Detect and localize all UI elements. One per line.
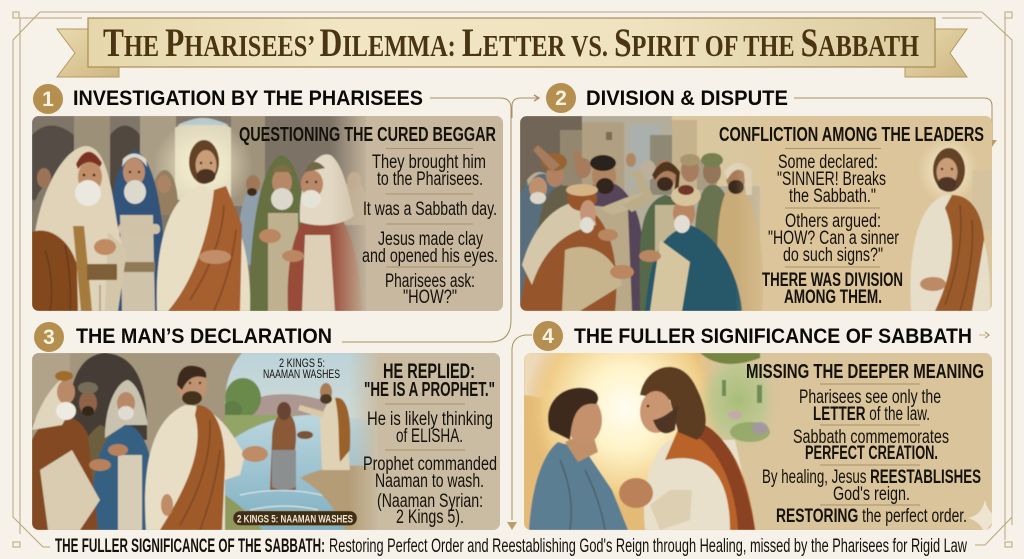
section 2 heading: 2 xyxy=(555,87,567,110)
panel 2 text: Others argued: xyxy=(785,211,881,232)
panel 3 text: "HE IS A PROPHET." xyxy=(364,379,495,401)
figure green xyxy=(639,194,676,311)
scene: the man and Naaman washing xyxy=(32,353,380,530)
right tan figure xyxy=(717,180,763,311)
illustration caption: NAAMAN WASHES xyxy=(263,367,340,381)
section 4 heading: THE FULLER SIGNIFICANCE OF SABBATH xyxy=(574,324,972,348)
illustration caption xyxy=(263,356,340,381)
section 1 heading: INVESTIGATION BY THE PHARISEES xyxy=(73,86,423,110)
panel 1 text: They brought him xyxy=(372,152,486,173)
scene: arguing crowd xyxy=(520,116,763,311)
scene: Jesus among Pharisees xyxy=(32,116,372,311)
healed man xyxy=(529,442,628,530)
panel 4 text: Pharisees see only the xyxy=(799,387,941,408)
panel 1 text: Jesus made clay xyxy=(378,229,483,250)
footer summary: THE FULLER SIGNIFICANCE OF THE SABBATH: xyxy=(55,536,325,557)
Prophet xyxy=(320,398,350,470)
front left turban xyxy=(520,205,616,311)
crowd background xyxy=(520,174,562,307)
panel 4 text: PERFECT CREATION. xyxy=(805,443,938,464)
panel 2 text: AMONG THEM. xyxy=(784,287,882,308)
panel 1: investigation xyxy=(32,116,503,311)
figure olive xyxy=(250,155,306,311)
section 3 heading: 3 xyxy=(43,326,55,349)
panel 3 text: 2 Kings 5). xyxy=(396,507,464,528)
panel 4: significance xyxy=(524,353,992,530)
sparkle xyxy=(968,500,992,530)
section 1 heading xyxy=(33,84,423,114)
footer summary xyxy=(55,536,967,557)
scene: Jesus and healed man xyxy=(524,353,772,530)
section 3 heading: THE MAN’S DECLARATION xyxy=(76,324,332,348)
panel 2 text: Some declared: xyxy=(778,152,878,173)
background figures xyxy=(32,186,48,234)
man xyxy=(145,405,245,530)
Jesus xyxy=(157,185,250,311)
panel 1 text: and opened his eyes. xyxy=(362,246,498,267)
section 4 heading xyxy=(533,321,972,351)
panel 3 text: of ELISHA. xyxy=(396,426,463,447)
panel 3 text: He is likely thinking xyxy=(367,409,493,430)
panel 3 text: HE REPLIED: xyxy=(383,360,475,383)
panel 2 text: "HOW? Can a sinner xyxy=(768,228,899,249)
Naaman in water xyxy=(270,413,296,490)
figure left elder xyxy=(34,146,126,262)
connector arrows xyxy=(342,95,997,530)
illustration caption: 2 KINGS 5: xyxy=(279,356,325,370)
panel 2: dispute xyxy=(520,116,992,311)
panel 4 text: Sabbath commemorates xyxy=(793,427,949,448)
panel 2 text: "SINNER! Breaks xyxy=(777,169,886,190)
caption pill xyxy=(233,511,357,526)
panel 1 text: Pharisees ask: xyxy=(385,271,475,292)
panel 4 text: God's reign. xyxy=(833,484,910,505)
panel 3 text: (Naaman Syrian: xyxy=(377,491,483,512)
title banner xyxy=(57,18,967,77)
panel 2 text xyxy=(719,124,984,308)
figure red xyxy=(287,222,362,311)
Jesus xyxy=(644,440,755,530)
panel 2 text: the Sabbath." xyxy=(789,186,876,207)
panel 3 text xyxy=(363,360,497,528)
section 2 heading: DIVISION & DISPUTE xyxy=(586,86,788,110)
panel 3 text: Naaman to wash. xyxy=(375,471,484,492)
panel 3 text: Prophet commanded xyxy=(363,454,497,475)
title: THE PHARISEES’ DILEMMA: LETTER VS. SPIRIT OF THE SABBATH xyxy=(103,20,919,65)
figure dark beard xyxy=(592,183,642,311)
elders xyxy=(88,424,110,484)
front right blue xyxy=(645,225,742,311)
section 1 heading: 1 xyxy=(42,88,54,111)
panel 4 text: By healing, Jesus REESTABLISHES xyxy=(762,467,981,488)
panel 3: declaration xyxy=(32,353,500,530)
figure blue xyxy=(112,150,164,311)
panel 1 text xyxy=(239,124,498,308)
panel 4 text: RESTORING the perfect order. xyxy=(776,506,967,527)
panel 1 text: to the Pharisees. xyxy=(377,169,483,190)
panel 4 text xyxy=(746,361,984,527)
panel 4 text: LETTER of the law. xyxy=(813,404,930,425)
panel 1 text: QUESTIONING THE CURED BEGGAR xyxy=(239,124,496,146)
panel 1 text: "HOW?" xyxy=(403,287,457,308)
panel 2 text: do such signs?" xyxy=(783,245,883,266)
Jesus at right xyxy=(910,136,992,311)
panel 1 text: It was a Sabbath day. xyxy=(363,199,497,220)
panel 2 text: THERE WAS DIVISION xyxy=(762,270,903,291)
section 3 heading xyxy=(34,322,332,352)
section 4 heading: 4 xyxy=(542,325,554,348)
section 2 heading xyxy=(546,83,788,113)
caption pill: 2 KINGS 5: NAAMAN WASHES xyxy=(237,514,353,526)
